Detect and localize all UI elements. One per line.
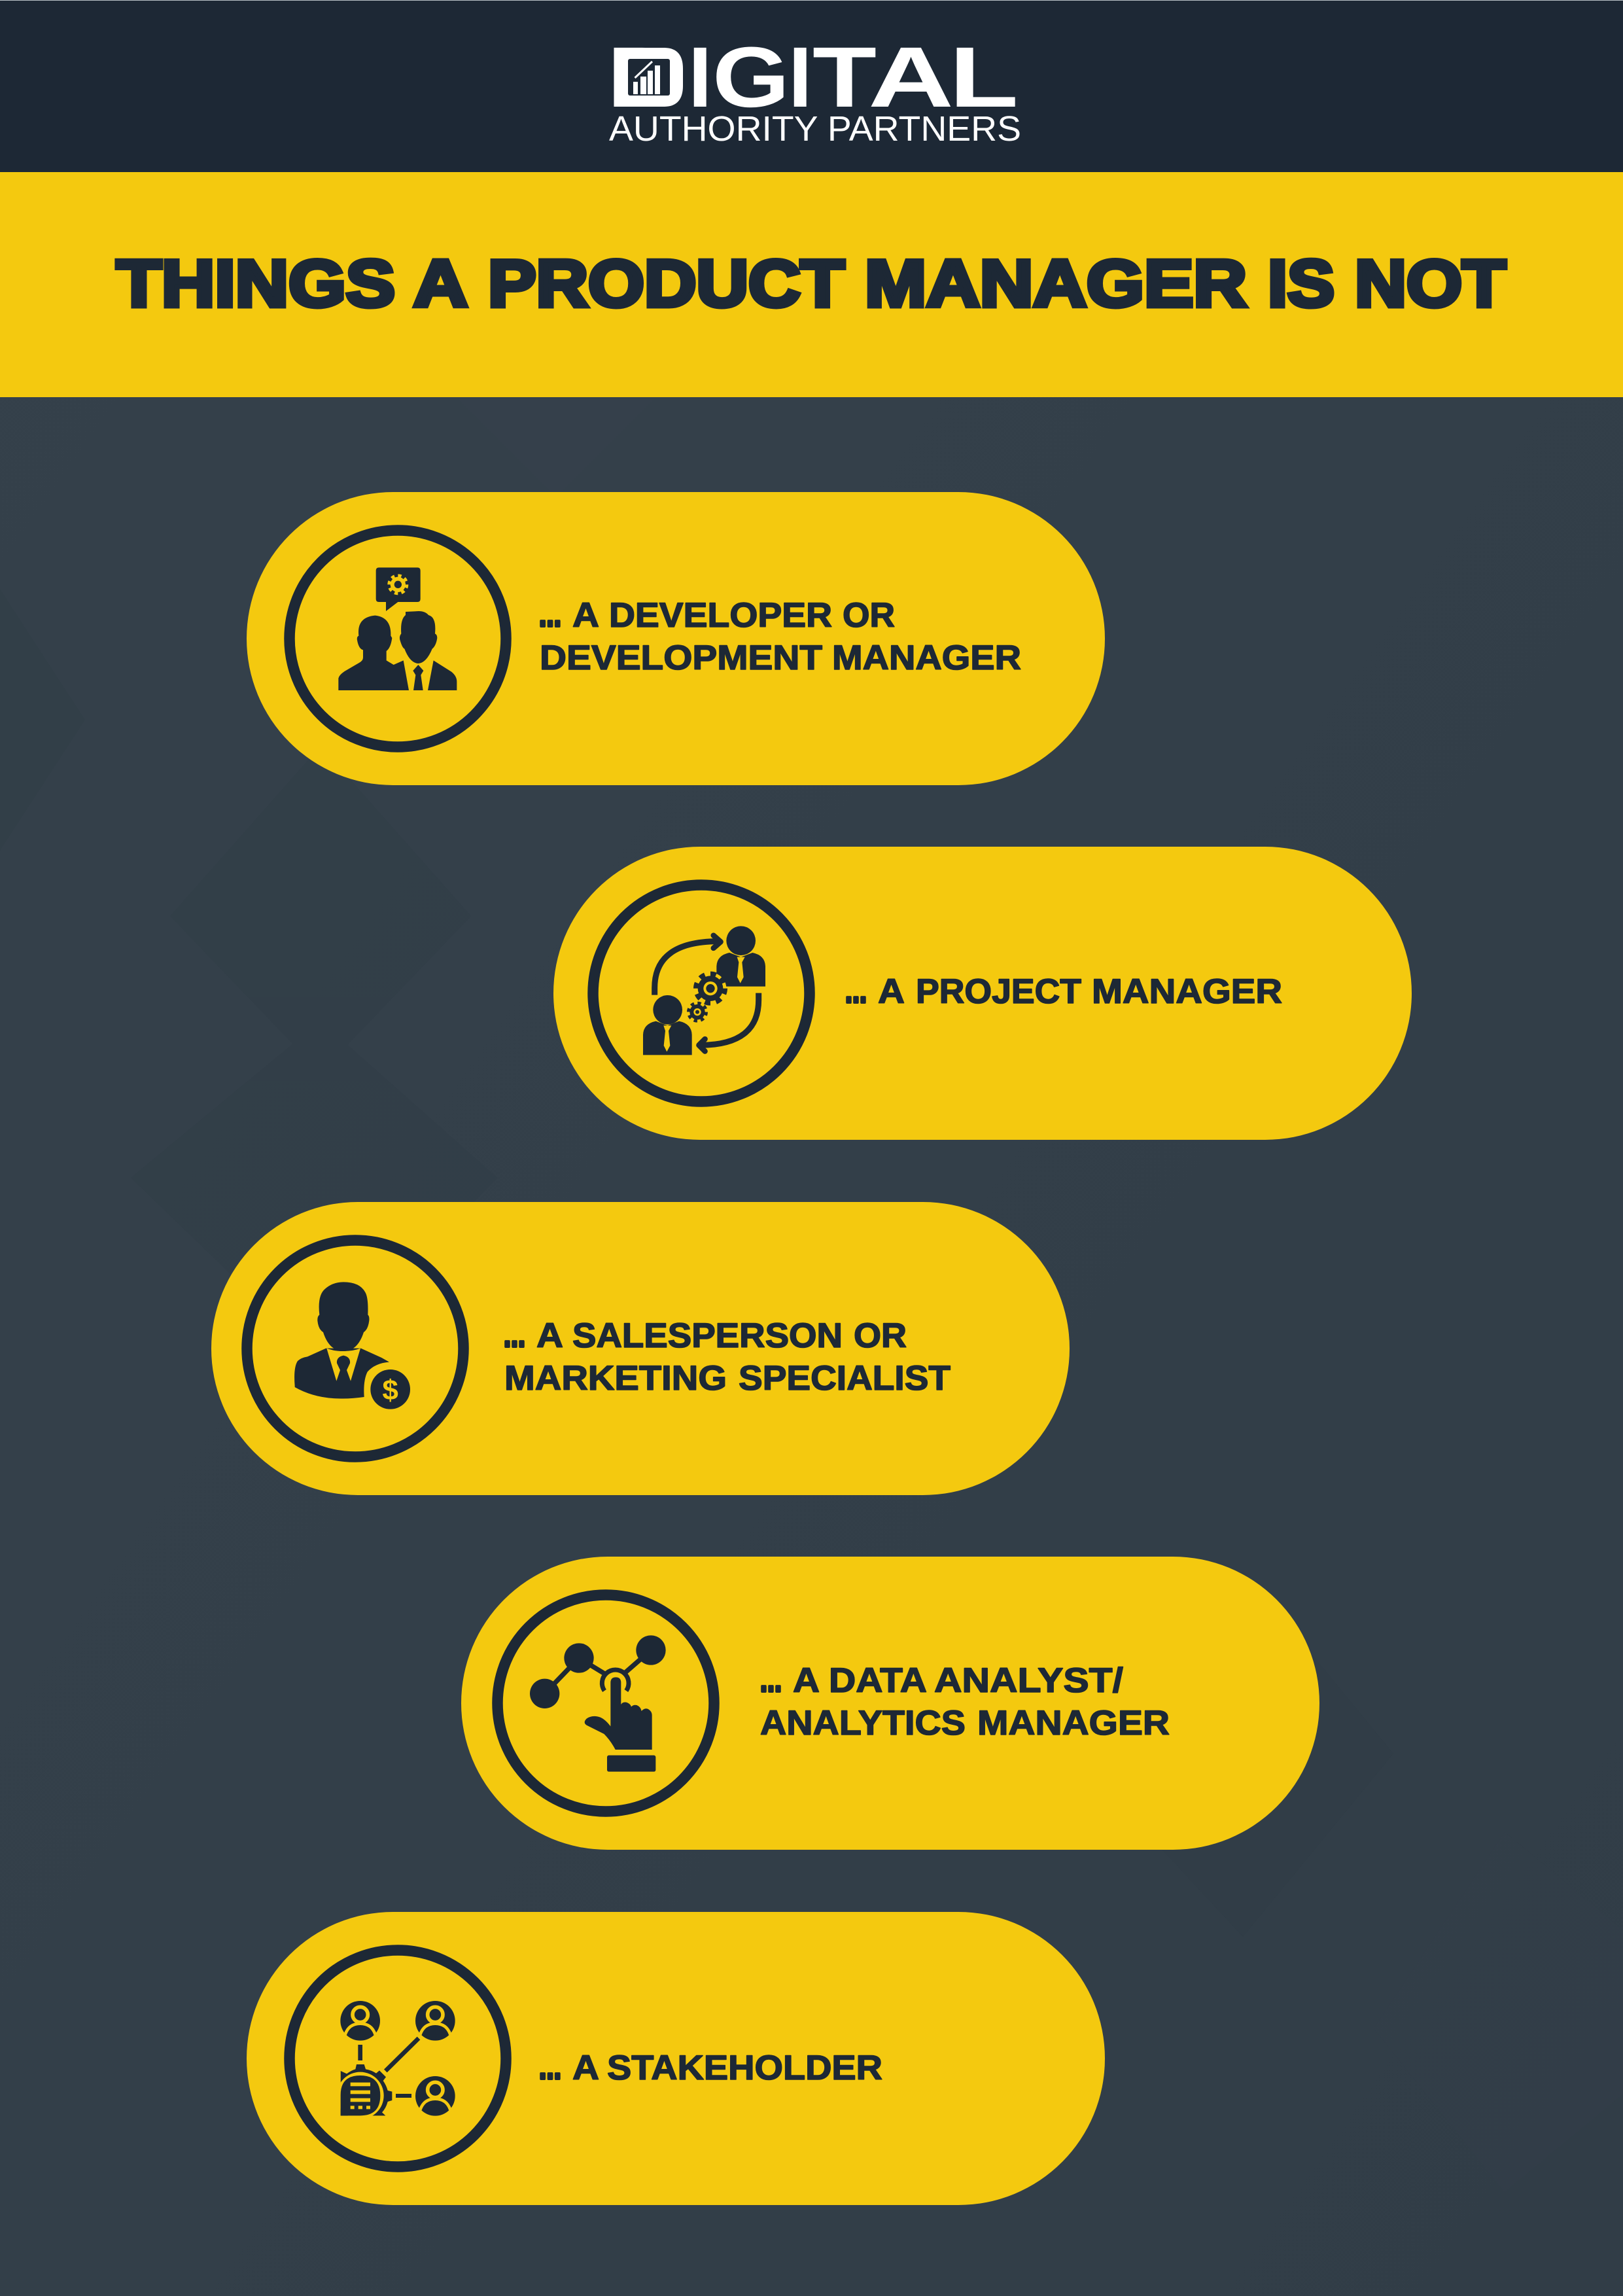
label: MANAGER xyxy=(1092,972,1282,1011)
panel: stakeholder xyxy=(247,1912,1105,2205)
label: OR xyxy=(854,1316,907,1355)
panel: data analyst / analytics manager xyxy=(461,1557,1319,1850)
title band xyxy=(0,172,1623,397)
label: PROJECT xyxy=(916,972,1081,1011)
logo word: DIGITAL xyxy=(606,29,1019,125)
icon ring xyxy=(289,530,506,747)
pill xyxy=(247,1912,1105,2205)
label: ... xyxy=(760,1661,782,1699)
label: DEVELOPMENT xyxy=(540,639,822,677)
logo word: DIGITAL: L xyxy=(949,29,1019,125)
title: NOT xyxy=(1355,247,1506,321)
label: ANALYTICS xyxy=(760,1704,966,1742)
icon ring xyxy=(247,1241,463,1457)
title: THINGS xyxy=(116,247,395,321)
label: A xyxy=(572,2049,599,2087)
panel: developer or development manager xyxy=(247,492,1105,785)
logo xyxy=(606,29,1021,149)
label: A xyxy=(536,1316,563,1355)
icon ring xyxy=(593,885,810,1102)
label: DEVELOPER xyxy=(609,596,832,635)
label: ... xyxy=(539,595,561,634)
pill xyxy=(461,1557,1319,1850)
logo word: DIGITAL: D xyxy=(606,29,688,125)
label: SPECIALIST xyxy=(739,1359,951,1398)
label xyxy=(845,972,1282,1011)
logo word: DIGITAL: T xyxy=(812,29,877,125)
label: ... xyxy=(504,1316,525,1354)
icon ring xyxy=(497,1595,714,1811)
title: A xyxy=(413,247,468,321)
pill xyxy=(247,492,1105,785)
title: MANAGER xyxy=(865,247,1247,321)
title: IS xyxy=(1268,247,1335,321)
icon: two people with speech bubble xyxy=(338,567,457,690)
label: MANAGER xyxy=(977,1704,1170,1742)
label xyxy=(504,1316,951,1398)
label: MARKETING xyxy=(504,1359,727,1398)
logo word: DIGITAL: A xyxy=(868,29,954,125)
icon: businessperson with dollar coin xyxy=(294,1282,410,1409)
label: OR xyxy=(843,596,895,635)
label: MANAGER xyxy=(832,639,1021,677)
logo subtitle: AUTHORITY PARTNERS xyxy=(609,109,1021,149)
title xyxy=(116,247,1506,321)
icon ring xyxy=(289,1950,506,2167)
label xyxy=(539,595,1021,677)
logo word: DIGITAL: I xyxy=(788,29,812,125)
panel: project manager xyxy=(553,847,1412,1140)
icon: businessperson with dollar coin: $ xyxy=(382,1374,398,1406)
icon: hand touching data chart xyxy=(530,1635,666,1772)
label: A xyxy=(793,1661,820,1700)
label: STAKEHOLDER xyxy=(607,2049,882,2087)
icon: two people exchanging with gears xyxy=(643,926,765,1055)
label: DATA xyxy=(829,1661,927,1700)
label: A xyxy=(572,596,599,635)
pill xyxy=(211,1202,1070,1495)
label: A xyxy=(878,972,905,1011)
logo word: DIGITAL: I xyxy=(688,29,712,125)
label: SALESPERSON xyxy=(572,1316,843,1355)
title: PRODUCT xyxy=(488,247,845,321)
panel: salesperson or marketing specialist xyxy=(211,1202,1070,1495)
header band xyxy=(0,0,1623,172)
icon: stakeholder network xyxy=(337,2001,455,2119)
label: ANALYST/ xyxy=(934,1661,1123,1700)
pill xyxy=(553,847,1412,1140)
label xyxy=(760,1661,1170,1742)
logo word: DIGITAL: G xyxy=(712,29,790,125)
label: ... xyxy=(845,972,867,1010)
label: ... xyxy=(539,2048,561,2087)
